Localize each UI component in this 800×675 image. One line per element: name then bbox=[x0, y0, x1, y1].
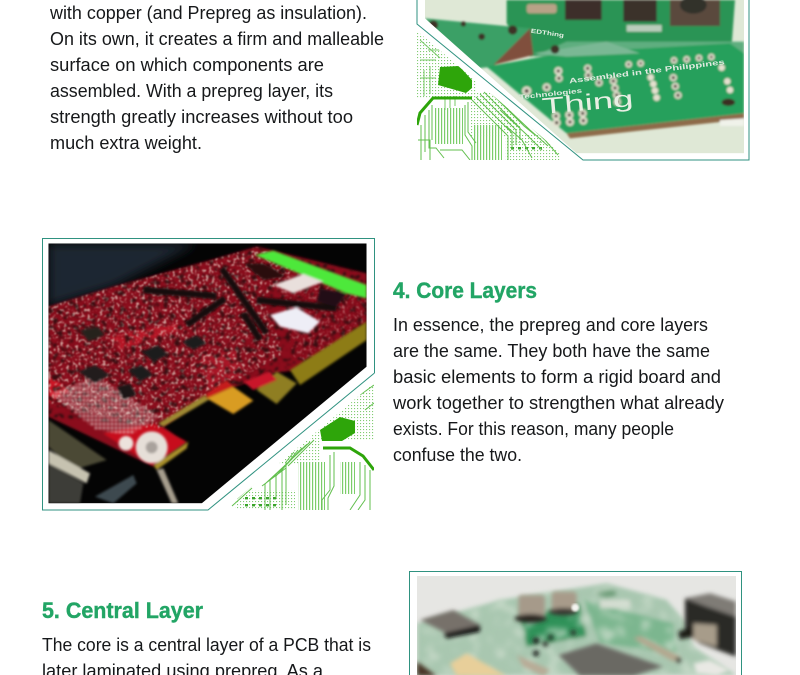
photo frame outline bbox=[410, 572, 742, 675]
board solder speckle bbox=[48, 247, 297, 430]
circuit pad bbox=[320, 417, 355, 441]
text block: central layer description: The core is a central layer of a PCB that is bbox=[42, 635, 371, 655]
panel: blurred PCB photo bbox=[410, 572, 742, 675]
photo: green circuit boards bbox=[425, 0, 744, 153]
photo: red circuit card bbox=[48, 243, 367, 503]
photo: circuit board close-up bbox=[417, 576, 736, 675]
text block: core layers description: work together to strengthen what already bbox=[392, 393, 724, 413]
board print: EDThing: EDThing bbox=[530, 29, 565, 39]
text block: core layers description bbox=[392, 315, 724, 465]
text block: prepreg layer description bbox=[49, 3, 384, 153]
circuit pad bbox=[438, 66, 472, 93]
heading: 5. Central Layer: 5. Central Layer bbox=[42, 598, 203, 623]
text block: core layers description: In essence, the prepreg and core layers bbox=[393, 315, 708, 335]
text block: prepreg layer description: strength greatly increases without too bbox=[50, 107, 353, 127]
board print: Technologies: Technologies bbox=[519, 88, 583, 101]
text block: prepreg layer description: On its own, it creates a firm and malleable bbox=[50, 29, 384, 49]
circuit trace corner bbox=[417, 30, 560, 160]
text block: central layer description bbox=[42, 635, 371, 675]
heading: 4. Core Layers: 4. Core Layers bbox=[393, 278, 537, 303]
text block: core layers description: confuse the two. bbox=[393, 445, 522, 465]
board mottling bbox=[424, 586, 696, 674]
thick trace bbox=[323, 448, 374, 470]
text block: core layers description: exists. For this reason, many people bbox=[393, 419, 674, 439]
photo frame outline bbox=[417, 0, 749, 160]
panel: red PCB photo with circuit corner bbox=[42, 238, 374, 510]
board print: Assembled in the Philippines: Assembled in the Philippines bbox=[568, 57, 725, 85]
text block: core layers description: basic elements to form a rigid board and bbox=[393, 367, 721, 387]
panel: green PCB photo with circuit corner bbox=[417, 0, 749, 160]
photo frame outline bbox=[42, 238, 374, 510]
text block: prepreg layer description: with copper (and Prepreg as insulation). bbox=[49, 3, 367, 23]
board print: Thing: Thing bbox=[541, 85, 634, 119]
text block: prepreg layer description: surface on which components are bbox=[50, 55, 324, 75]
thick trace bbox=[417, 98, 472, 125]
text block: prepreg layer description: assembled. With a prepreg layer, its bbox=[50, 81, 333, 101]
text block: prepreg layer description: much extra weight. bbox=[50, 133, 202, 153]
circuit trace corner bbox=[232, 385, 374, 510]
text block: core layers description: are the same. They both have the same bbox=[393, 341, 710, 361]
